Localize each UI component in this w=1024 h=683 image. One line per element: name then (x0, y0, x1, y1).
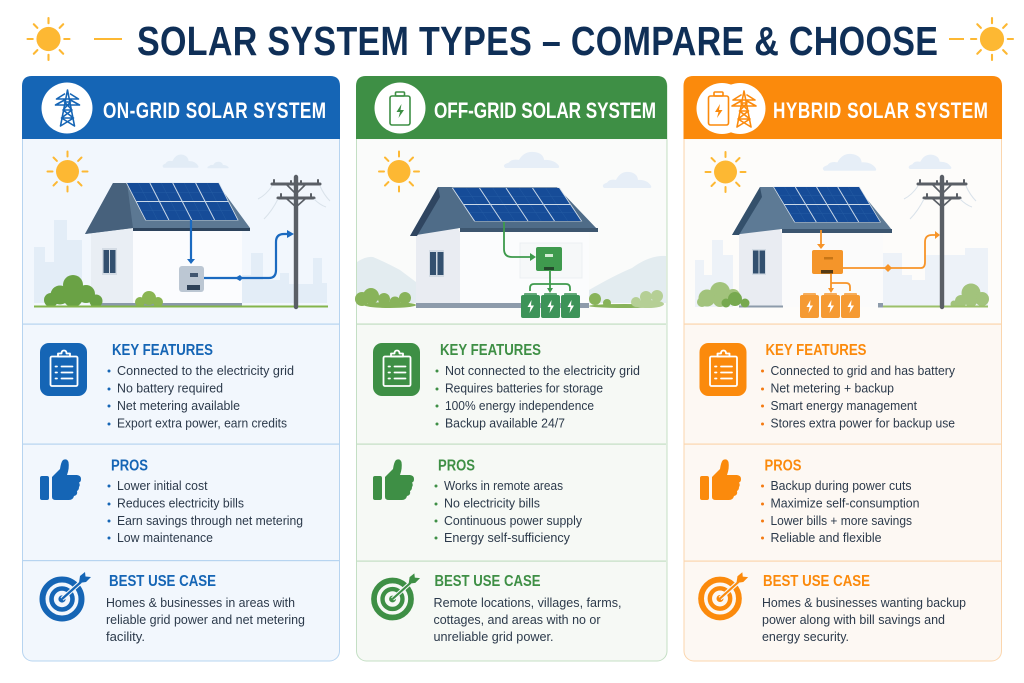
section: key features: KEY FEATURES (112, 342, 213, 359)
section: pros: Low maintenance (117, 531, 213, 545)
section: pros (700, 458, 920, 545)
section: pros: Reliable and flexible (770, 531, 882, 545)
title accent line right (949, 38, 964, 40)
icon: title sun left (28, 18, 70, 60)
section: key features: No battery required (117, 382, 223, 396)
section: best use case: Homes & businesses in areas with (106, 596, 295, 610)
section: best use case: reliable grid power and net metering (106, 613, 305, 627)
header: on-grid (22, 76, 340, 139)
card background (22, 76, 340, 661)
section: pros (373, 458, 583, 545)
title: SOLAR SYSTEM TYPES – COMPARE & CHOOSE (137, 18, 938, 64)
section: best use case: Remote locations, villages, farms, (434, 596, 622, 610)
section: key features: Not connected to the electricity grid (445, 364, 640, 378)
header: off-grid (356, 76, 667, 139)
header: off-grid: OFF-GRID SOLAR SYSTEM (434, 99, 656, 124)
section: best use case: BEST USE CASE (763, 573, 870, 590)
section: best use case (42, 572, 305, 644)
section: pros (40, 458, 303, 545)
section: pros: Lower bills + more savings (770, 514, 912, 528)
section: best use case (374, 573, 622, 644)
divider (23, 444, 339, 445)
section: pros: Earn savings through net metering (117, 514, 303, 528)
section: key features: 100% energy independence (445, 399, 594, 413)
divider (684, 444, 1001, 445)
section: pros: PROS (438, 458, 475, 475)
section: key features: Connected to grid and has battery (770, 364, 956, 378)
divider (23, 560, 339, 561)
section: pros: Maximize self-consumption (770, 496, 920, 510)
header: hybrid: HYBRID SOLAR SYSTEM (773, 99, 988, 124)
section: pros: No electricity bills (444, 496, 540, 510)
icon: title sun right (971, 18, 1013, 60)
divider (684, 324, 1001, 325)
section: best use case: energy security. (762, 630, 849, 644)
section: key features: Stores extra power for backup use (770, 417, 955, 431)
section: best use case: BEST USE CASE (434, 573, 541, 590)
section: key features: KEY FEATURES (766, 342, 867, 359)
section: key features: Connected to the electricity grid (117, 364, 294, 378)
illustration: off-grid house (355, 140, 666, 323)
section: pros: Lower initial cost (117, 479, 208, 493)
section: best use case: Homes & businesses wanting backup (762, 596, 966, 610)
illustration: hybrid house (685, 140, 1001, 323)
section: key features: Backup available 24/7 (445, 417, 565, 431)
section: best use case: unreliable grid power. (434, 630, 554, 644)
divider (357, 444, 666, 445)
section: best use case: facility. (106, 630, 145, 644)
header: hybrid (684, 76, 1002, 139)
section: best use case (701, 572, 966, 644)
section: key features: Export extra power, earn credits (117, 417, 287, 431)
illustration: on-grid house (34, 152, 330, 308)
section: pros: Continuous power supply (444, 514, 583, 528)
card background (684, 76, 1002, 661)
section: pros: Works in remote areas (444, 479, 563, 493)
divider (684, 560, 1001, 562)
section: pros: Energy self-sufficiency (444, 531, 571, 545)
panel: on-grid solar system (22, 76, 340, 661)
section: best use case: power along with bill savings and (762, 613, 945, 627)
section: pros: PROS (764, 458, 802, 475)
section: key features: Net metering + backup (770, 382, 894, 396)
section: key features (373, 342, 640, 431)
section: pros: PROS (111, 458, 148, 475)
panel: off-grid solar system (355, 76, 667, 661)
section: best use case: cottages, and areas with no or (434, 613, 600, 627)
section: key features: Requires batteries for storage (445, 382, 603, 396)
section: key features: Smart energy management (770, 399, 918, 413)
section: key features: Net metering available (117, 399, 240, 413)
section: best use case: BEST USE CASE (109, 573, 216, 590)
section: pros: Backup during power cuts (770, 479, 912, 493)
divider (357, 560, 666, 562)
section: key features: KEY FEATURES (440, 342, 541, 359)
divider (23, 324, 339, 325)
panel: hybrid solar system (684, 76, 1002, 661)
section: pros: Reduces electricity bills (117, 496, 244, 510)
card background (356, 76, 667, 661)
header: on-grid: ON-GRID SOLAR SYSTEM (103, 99, 326, 124)
divider (357, 324, 666, 325)
section: key features (40, 342, 294, 431)
title accent line left (94, 38, 122, 40)
section: key features (700, 342, 956, 431)
